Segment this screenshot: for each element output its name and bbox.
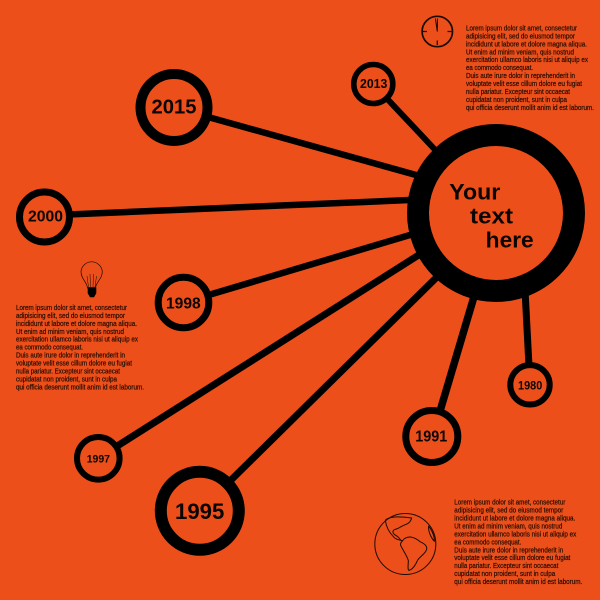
- central circle: your text here: Your: [449, 179, 501, 204]
- node: 1991: 1991: [415, 429, 448, 446]
- text block: left: ea commodo consequat.: [16, 345, 83, 352]
- text block: bottom right: qui officia deserunt mollit anim id est laborum.: [454, 579, 582, 586]
- text block: left: qui officia deserunt mollit anim id est laborum.: [16, 384, 144, 391]
- text block: top right: voluptate velit esse cillum dolore eu fugiat: [466, 81, 582, 88]
- node: 1995: [161, 472, 239, 550]
- text block: top right: ea commodo consequat.: [466, 65, 533, 72]
- icon: light bulb: [81, 262, 102, 297]
- text block: bottom right: [454, 500, 582, 586]
- node: 1998: [158, 277, 209, 328]
- text block: top right: [466, 26, 594, 112]
- node: 1998: 1998: [166, 295, 201, 312]
- text block: bottom right: nulla pariatur. Excepteur sint occaecat: [454, 563, 558, 570]
- text block: bottom right: Ut enim ad minim veniam, quis nostrud: [454, 523, 562, 530]
- text block: top right: Duis aute irure dolor in reprehenderit in: [466, 73, 575, 80]
- connector lines: [44, 84, 530, 511]
- text block: bottom right: adipisicing elit, sed do eiusmod tempor: [454, 508, 564, 515]
- text block: bottom right: ea commodo consequat.: [454, 539, 521, 546]
- icon: globe: [375, 513, 436, 574]
- text block: bottom right: cupidatat non proident, sunt in culpa: [454, 571, 555, 578]
- text block: bottom right: Lorem ipsum dolor sit amet, consectetur: [454, 500, 566, 507]
- text block: left: incididunt ut labore et dolore magna aliqua.: [16, 321, 137, 328]
- text block: left: Lorem ipsum dolor sit amet, consectetur: [16, 305, 128, 312]
- text block: bottom right: Duis aute irure dolor in reprehenderit in: [454, 547, 563, 554]
- node: 1991: [406, 410, 458, 462]
- text block: left: Ut enim ad minim veniam, quis nostrud: [16, 329, 124, 336]
- node: 2000: [20, 192, 70, 242]
- text block: left: [16, 305, 144, 391]
- node: 2015: [140, 74, 208, 141]
- text block: bottom right: exercitation ullamco laboris nisi ut aliquip ex: [454, 531, 577, 538]
- text block: bottom right: incididunt ut labore et dolore magna aliqua.: [454, 516, 575, 523]
- text block: left: exercitation ullamco laboris nisi ut aliquip ex: [16, 337, 138, 344]
- icon: clock: [422, 16, 452, 47]
- text block: top right: exercitation ullamco laboris nisi ut aliquip ex: [466, 57, 588, 64]
- text block: top right: adipisicing elit, sed do eiusmod tempor: [466, 33, 576, 40]
- node: 1997: 1997: [87, 453, 110, 465]
- node: 2013: [354, 64, 393, 104]
- node: 2015: 2015: [152, 96, 196, 118]
- text block: left: cupidatat non proident, sunt in culpa: [16, 376, 117, 383]
- node: 1980: [510, 365, 550, 404]
- text block: left: nulla pariatur. Excepteur sint occaecat: [16, 368, 120, 375]
- node: 2000: 2000: [28, 209, 63, 226]
- central circle: your text here: [418, 135, 574, 291]
- text block: bottom right: voluptate velit esse cillum dolore eu fugiat: [454, 555, 570, 562]
- node: 1997: [77, 437, 120, 480]
- text block: left: adipisicing elit, sed do eiusmod tempor: [16, 313, 126, 320]
- central circle: your text here: text: [470, 203, 514, 228]
- text block: top right: nulla pariatur. Excepteur sint occaecat: [466, 89, 570, 96]
- node: 2013: 2013: [360, 77, 387, 91]
- text block: top right: Lorem ipsum dolor sit amet, consectetur: [466, 26, 578, 32]
- text block: top right: incididunt ut labore et dolore magna aliqua.: [466, 41, 587, 48]
- text block: top right: cupidatat non proident, sunt in culpa: [466, 97, 567, 104]
- node: 1995: 1995: [175, 499, 224, 524]
- text block: left: Duis aute irure dolor in reprehenderit in: [16, 353, 125, 360]
- text block: top right: Ut enim ad minim veniam, quis nostrud: [466, 49, 574, 56]
- node: 1980: 1980: [518, 380, 542, 392]
- text block: left: voluptate velit esse cillum dolore eu fugiat: [16, 361, 132, 368]
- central circle: your text here: here: [486, 227, 534, 252]
